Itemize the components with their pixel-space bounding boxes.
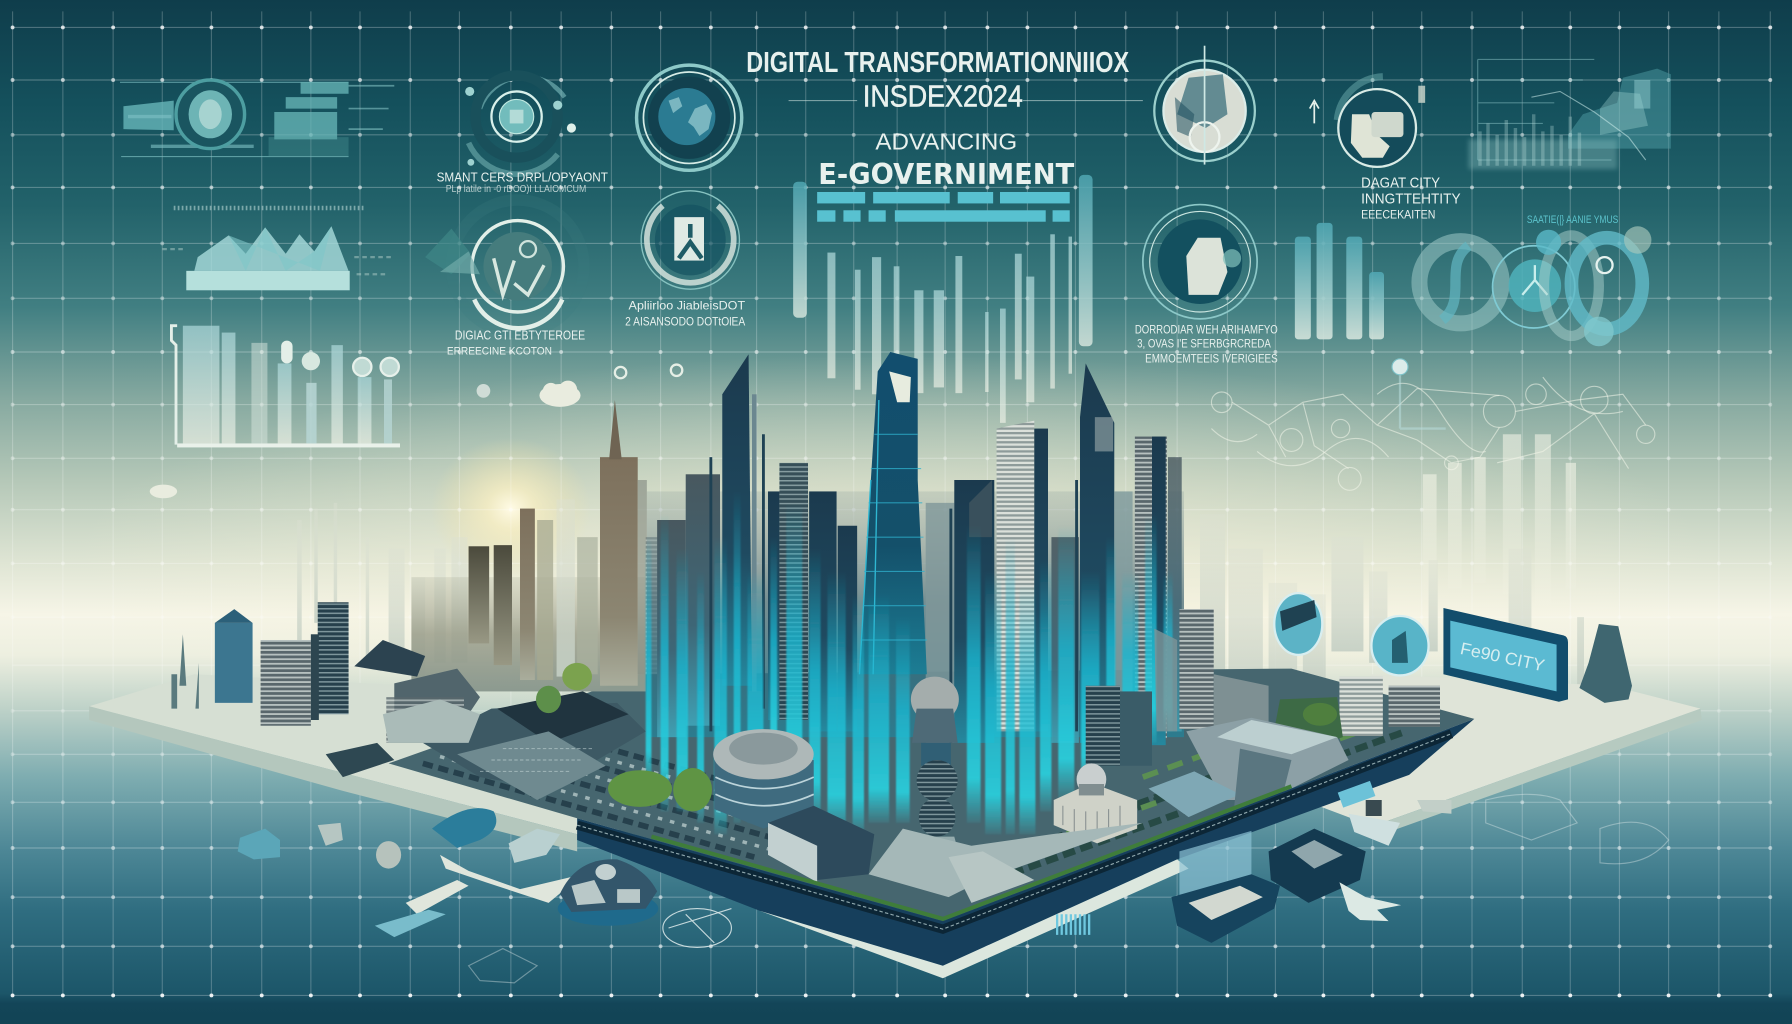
pale background bars right: [1423, 434, 1576, 606]
platform: city ground: [389, 669, 1474, 921]
billboard: [1443, 608, 1568, 702]
subtitle: ADVANCING: [875, 129, 1017, 155]
text: right lower label: 3, OVAS I'E SFERBGRCREDA: [1137, 336, 1271, 350]
icon: digital city hand: [1310, 77, 1425, 167]
text: right lower label: DORRODIAR WEH ARIHAMFYO: [1135, 323, 1278, 337]
icon: earth top right: [1154, 46, 1255, 165]
text: digital city label: [1361, 175, 1461, 221]
text: application label: [625, 299, 746, 329]
city blocks: right buildings: [1086, 609, 1440, 817]
bubble displays: [1274, 593, 1429, 675]
front buildings: [768, 806, 1143, 903]
skyline: left side towers: [171, 400, 680, 743]
icon: paper plane: [1339, 882, 1401, 921]
skyline: central dark towers: [647, 354, 1184, 745]
icon: location pin: [477, 359, 1408, 398]
title: [746, 47, 1143, 113]
platform: pale slabs: [89, 674, 1702, 851]
icon: globe: [637, 65, 742, 170]
sketch ellipse: [469, 794, 1669, 983]
text: application label: Apliirloo JiableisDOT: [629, 299, 746, 313]
text: digital label: DIGIAC GTI EBTYTEROEE: [455, 328, 585, 342]
text: smart cities label: SMANT CERS DRPL/OPYAONT: [437, 171, 608, 185]
network diagram: [1211, 371, 1655, 490]
chart: lower left bars: [171, 326, 400, 447]
text: digital label: ERREECINE KCOTON: [447, 345, 552, 357]
central bar chart: [793, 175, 1093, 423]
title cyan bars: [817, 192, 1070, 222]
billboard: Fe90 CITY: [1459, 638, 1547, 676]
panel: top left data chart: [120, 80, 394, 157]
text: application label: 2 AISANSODO DOTtOlEA: [625, 315, 745, 329]
chart: top right skyline data: [1469, 59, 1671, 169]
text: smart cities label: [437, 171, 608, 195]
cyan data streaks: [646, 491, 1173, 834]
skyline: far background towers: [297, 503, 1632, 709]
sculpture: [1579, 624, 1632, 703]
domed tower: [910, 677, 966, 880]
skyline: main tower: [859, 352, 927, 674]
chart: mountain area: [162, 208, 394, 290]
title: DIGITAL TRANSFORMATIONNIIOX: [746, 47, 1129, 79]
city blocks: left machinery: [326, 691, 646, 800]
text: digital city label: INNGTTEHTITY: [1361, 191, 1461, 207]
chart: right teal bars: [1295, 223, 1384, 339]
text: digital label: [447, 328, 585, 357]
icon: shield: [641, 191, 739, 289]
text: right lower label: EMMOEMTEEIS IVERIGIEES: [1145, 351, 1278, 365]
round building: [713, 729, 814, 829]
boat: [558, 859, 658, 926]
text: right lower label: [1135, 323, 1278, 365]
title: INSDEX2024: [863, 78, 1023, 113]
text: digital city label: EEECEKAITEN: [1361, 207, 1435, 221]
icon: digital government seal: [425, 200, 584, 333]
chart: overlapping rings: [1419, 226, 1651, 346]
text: rings label: SAATIE(|} AANIE YMUS: [1527, 214, 1618, 226]
floating objects left: [238, 808, 583, 937]
capitol building: [1054, 763, 1137, 843]
small boats and bar mark: [1057, 800, 1451, 935]
icon: data protection figure: [1143, 205, 1257, 319]
subtitle: E-GOVERNIMENT: [818, 157, 1075, 191]
platform: edge layers: [577, 719, 1474, 978]
glass case and dark box: [1171, 829, 1366, 943]
subtitle: [818, 129, 1075, 191]
icon: smart city dial: [465, 75, 576, 174]
text: digital city label: DAGAT CITY: [1361, 175, 1440, 191]
text: smart cities label: PLp latile in -0 rDOO)I LLAIOMCUM: [446, 184, 586, 195]
icon: cloud: [150, 381, 581, 498]
trees: [536, 663, 1337, 811]
